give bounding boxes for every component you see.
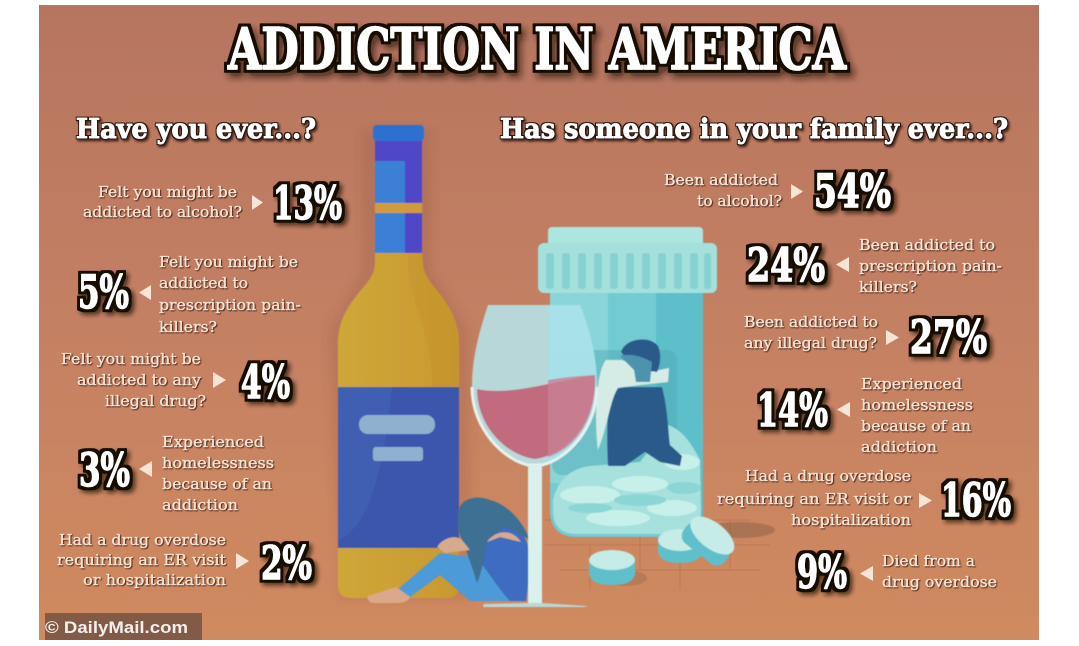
stat: 13% alcohol: addicted to alcohol? [83, 203, 242, 221]
stat: 16% family overdose: 16% [941, 473, 1011, 527]
stat: 24% family painkillers: Been addicted to [859, 236, 995, 254]
stat: 54% family alcohol [664, 164, 891, 218]
stat: 27% family illegal drug [744, 310, 987, 364]
stat: 4% illegal drug: 4% [241, 355, 290, 409]
stat: 4% illegal drug [61, 350, 290, 410]
stat: 14% family homelessness: because of an [861, 417, 971, 435]
illustration: wine glass [472, 305, 597, 607]
stat: 2% overdose: Had a drug overdose [59, 531, 226, 549]
stat: 24% family painkillers: killers? [859, 278, 917, 296]
stat: 3% homelessness: 3% [79, 443, 130, 497]
source badge: © DailyMail.com [45, 618, 188, 637]
illustration: pill bottle [538, 227, 717, 537]
stat: 3% homelessness: homelessness [162, 454, 274, 472]
stat: 16% family overdose: requiring an ER visit or [717, 490, 912, 508]
stat: 16% family overdose [717, 467, 1011, 529]
stat: 9% died from overdose: Died from a [882, 552, 975, 570]
person inside pill bottle [596, 339, 682, 466]
stat: 54% family alcohol: to alcohol? [697, 192, 782, 210]
stat: 14% family homelessness [757, 375, 973, 456]
stat: 13% alcohol: 13% [273, 176, 342, 230]
title: ADDICTION IN AMERICA [227, 16, 847, 83]
stat: 3% homelessness [79, 433, 274, 514]
stat: 9% died from overdose: drug overdose [882, 573, 997, 591]
stat: 14% family homelessness: addiction [861, 438, 937, 456]
stat: 5% painkillers: addicted to [159, 274, 248, 292]
stat: 2% overdose [57, 531, 312, 590]
illustration: woman sitting [368, 498, 531, 603]
stat: 2% overdose: requiring an ER visit [57, 551, 226, 569]
stat: 4% illegal drug: Felt you might be [61, 350, 201, 368]
stat: 54% family alcohol: Been addicted [664, 171, 778, 189]
stat: 27% family illegal drug: 27% [910, 310, 987, 364]
stat: 9% died from overdose [797, 545, 997, 599]
stat: 2% overdose: 2% [261, 536, 312, 590]
stat: 5% painkillers: prescription pain- [159, 296, 301, 314]
stat: 13% alcohol [83, 176, 342, 230]
stat: 24% family painkillers [747, 236, 1002, 296]
stat: 5% painkillers [78, 253, 301, 336]
stat: 16% family overdose: Had a drug overdose [745, 467, 911, 485]
heading: family: Has someone in your family ever...? [500, 114, 1008, 145]
stat: 3% homelessness: because of an [162, 475, 272, 493]
stat: 5% painkillers: 5% [78, 265, 129, 319]
source badge [45, 613, 202, 640]
stat: 3% homelessness: Experienced [162, 433, 264, 451]
stat: 5% painkillers: killers? [159, 318, 217, 336]
heading: have you ever: Have you ever...? [76, 114, 316, 145]
stat: 5% painkillers: Felt you might be [159, 253, 298, 271]
stat: 14% family homelessness: homelessness [861, 396, 973, 414]
pills inside bottle [553, 425, 701, 534]
stat: 4% illegal drug: illegal drug? [105, 392, 206, 410]
stat: 3% homelessness: addiction [162, 496, 238, 514]
stat: 14% family homelessness: Experienced [861, 375, 962, 393]
illustration: loose pills [589, 509, 775, 586]
stat: 27% family illegal drug: any illegal drug? [744, 334, 877, 352]
stat: 27% family illegal drug: Been addicted to [744, 313, 878, 331]
illustration: wine bottle [328, 125, 470, 600]
stat: 2% overdose: or hospitalization [83, 571, 226, 589]
stat: 14% family homelessness: 14% [757, 383, 828, 437]
stat: 24% family painkillers: 24% [747, 238, 825, 292]
stat: 16% family overdose: hospitalization [791, 511, 911, 529]
stat: 13% alcohol: Felt you might be [98, 183, 237, 201]
illustration: floor boards [545, 520, 770, 590]
stat: 9% died from overdose: 9% [797, 545, 847, 599]
stat: 24% family painkillers: prescription pain- [859, 257, 1002, 275]
stat: 4% illegal drug: addicted to any [77, 371, 202, 389]
stat: 54% family alcohol: 54% [814, 164, 891, 218]
